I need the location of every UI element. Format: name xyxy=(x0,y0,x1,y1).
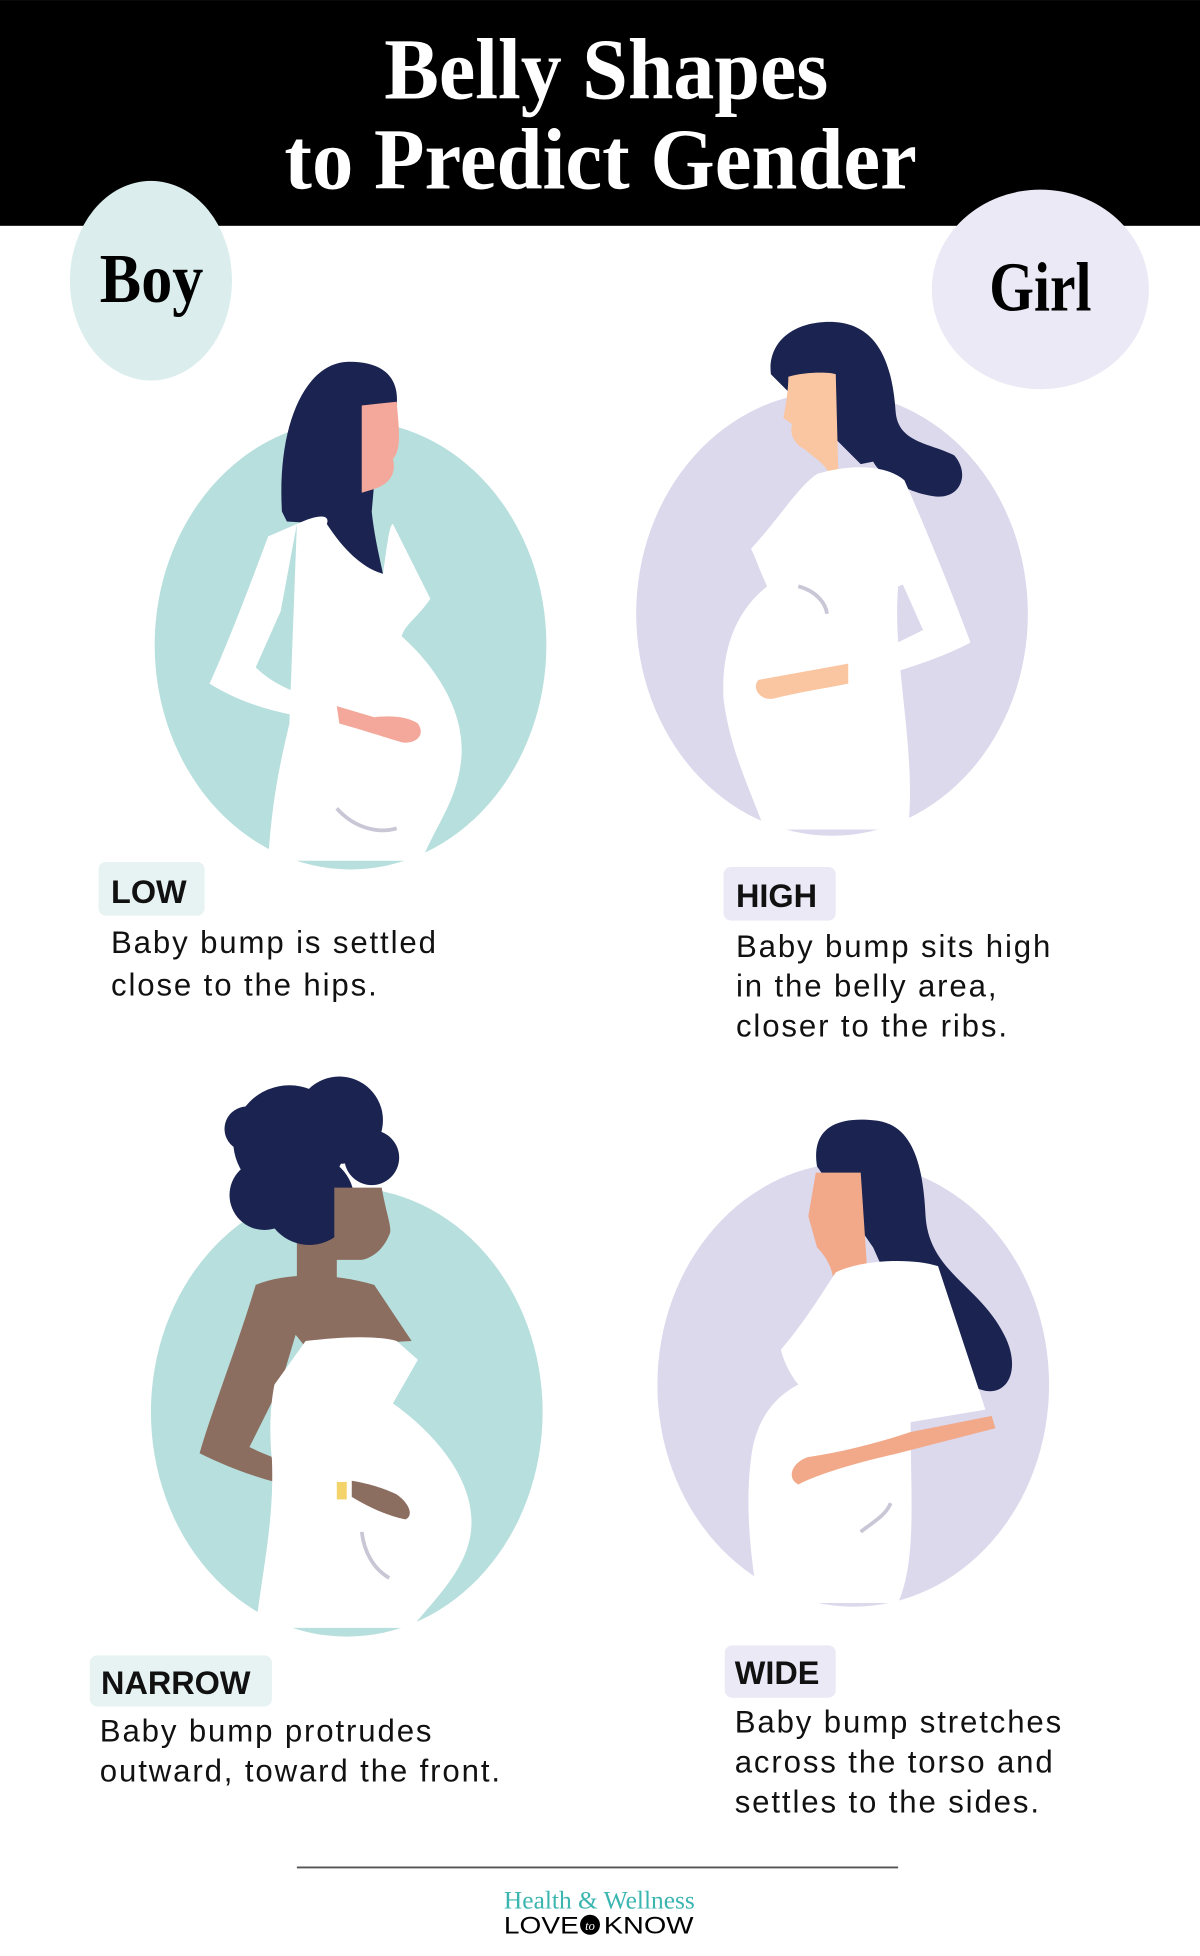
header band xyxy=(0,0,1200,226)
badge: Boy: Boy xyxy=(100,241,203,318)
badge: Boy xyxy=(70,181,232,380)
label: HIGH xyxy=(723,867,836,921)
text: low description: Baby bump is settled xyxy=(111,925,438,960)
text: low description: close to the hips. xyxy=(111,967,379,1002)
text: narrow description: outward, toward the front. xyxy=(100,1753,502,1788)
text: high description: in the belly area, xyxy=(736,969,998,1004)
badge: Girl xyxy=(932,190,1149,389)
text: wide description: settles to the sides. xyxy=(735,1785,1041,1820)
badge: Girl: Girl xyxy=(989,250,1091,327)
text: narrow description: Baby bump protrudes xyxy=(100,1713,433,1748)
logo: Health & Wellness xyxy=(504,1888,695,1915)
label: HIGH: HIGH xyxy=(736,878,817,914)
label: NARROW xyxy=(90,1655,272,1706)
label: WIDE: WIDE xyxy=(735,1655,819,1691)
figure: low belly xyxy=(155,362,546,869)
text: narrow description xyxy=(100,1713,502,1788)
title: Belly Shapes xyxy=(384,21,828,118)
label: NARROW: NARROW xyxy=(101,1665,251,1701)
title xyxy=(284,21,917,207)
text: high description: closer to the ribs. xyxy=(736,1009,1009,1044)
logo: KNOW xyxy=(604,1914,694,1940)
figure: high belly xyxy=(636,322,1028,836)
text: high description xyxy=(736,929,1052,1044)
text: wide description xyxy=(735,1705,1063,1820)
text: low description xyxy=(111,925,438,1002)
text: wide description: across the torso and xyxy=(735,1745,1055,1780)
logo xyxy=(504,1888,695,1940)
label: LOW: LOW xyxy=(111,874,187,910)
label: LOW xyxy=(99,862,205,916)
figure: wide belly xyxy=(657,1120,1049,1607)
figure: narrow belly xyxy=(151,1077,543,1637)
title: to Predict Gender xyxy=(284,110,917,207)
text: high description: Baby bump sits high xyxy=(736,929,1052,964)
logo: LOVE xyxy=(504,1914,579,1940)
label: WIDE xyxy=(725,1645,836,1698)
logo: to xyxy=(585,1919,595,1933)
text: wide description: Baby bump stretches xyxy=(735,1705,1063,1740)
